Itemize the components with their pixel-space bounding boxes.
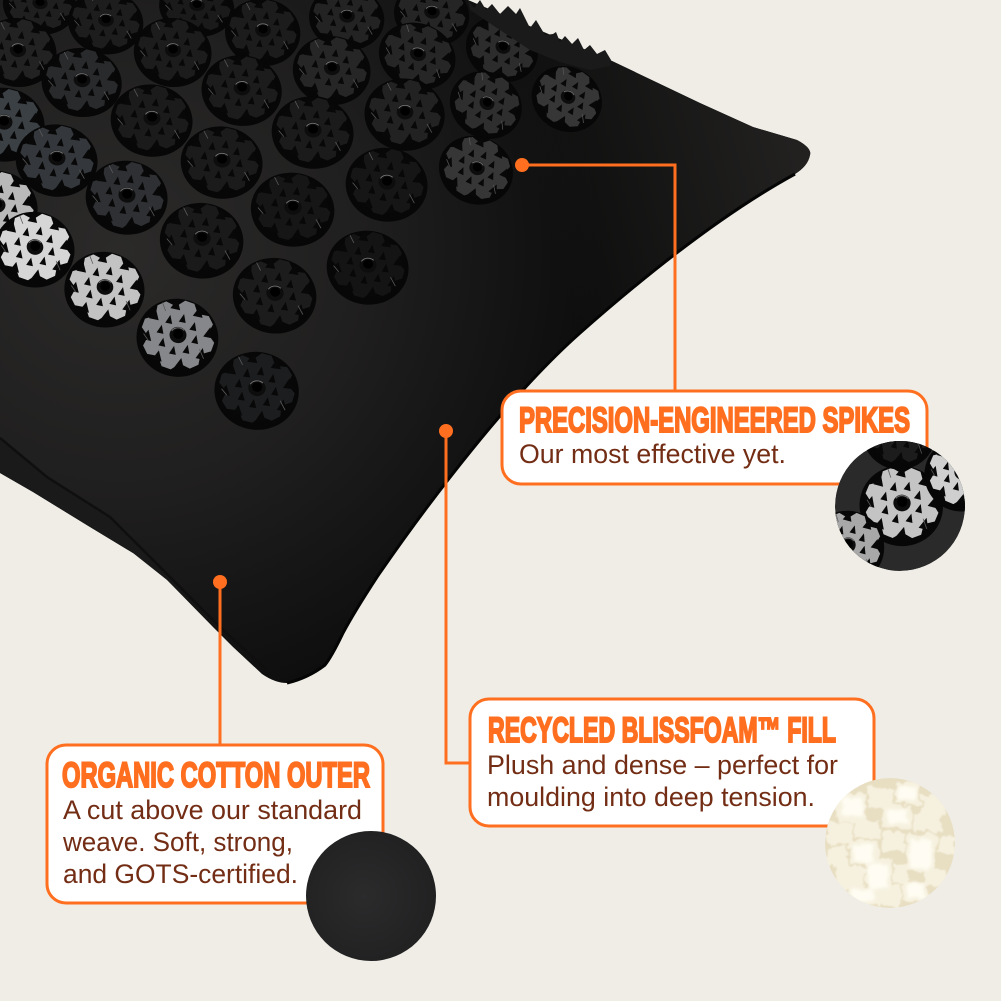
text: foam description: Plush and dense – perfect for [487, 750, 838, 780]
text: cotton description: A cut above our standard [63, 795, 362, 825]
side-on spikes along top edge [468, 0, 611, 70]
text: spikes description: Our most effective yet. [519, 439, 786, 469]
spike discs [0, 0, 614, 435]
pillow body [0, 0, 810, 683]
inset photo: foam close-up [825, 778, 955, 908]
callout: organic cotton outer [47, 745, 383, 903]
inset photo: cotton close-up [306, 831, 436, 961]
callout: precision-engineered spikes [502, 391, 927, 484]
text: foam description: moulding into deep tension. [487, 782, 815, 812]
leader: foam callout [439, 424, 470, 763]
leader: spikes callout [515, 158, 675, 391]
text: cotton description: weave. Soft, strong, [62, 827, 293, 857]
heading: cotton: ORGANIC COTTON OUTER [62, 756, 370, 795]
inset photo: spike disc close-up [835, 441, 965, 571]
leader: cotton callout [213, 575, 227, 745]
text: cotton description: and GOTS-certified. [63, 859, 298, 889]
callout: recycled blissfoam fill [470, 699, 874, 826]
acupressure pillow photo [0, 0, 810, 683]
heading: foam: RECYCLED BLISSFOAM™ FILL [488, 711, 836, 750]
